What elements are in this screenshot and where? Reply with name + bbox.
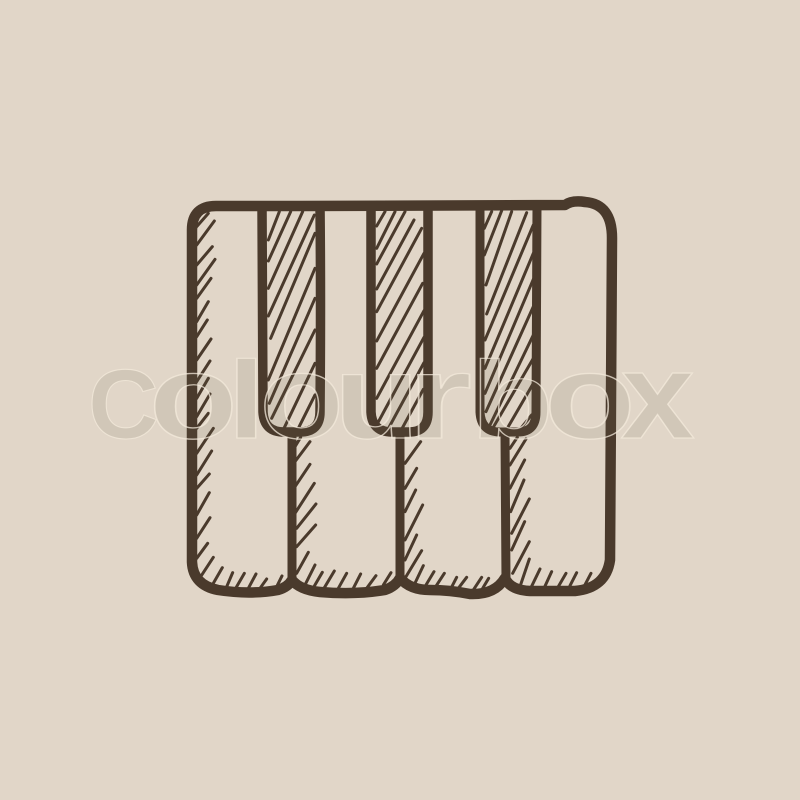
keyboard outer outline bbox=[192, 201, 612, 594]
watermark: o bbox=[260, 330, 344, 464]
watermark: r bbox=[407, 329, 472, 464]
black key 1 bbox=[262, 206, 320, 432]
hatching: upper left white key and black key 1 bbox=[197, 212, 315, 428]
watermark: u bbox=[334, 329, 420, 464]
hatching: lower white keys 3 and 4 bbox=[405, 437, 591, 590]
watermark bbox=[88, 328, 695, 465]
watermark: o bbox=[544, 329, 636, 464]
icon: piano keys bbox=[192, 201, 612, 594]
watermark: x bbox=[621, 328, 695, 465]
black key 3 bbox=[480, 206, 537, 432]
white key dividers bbox=[292, 434, 506, 582]
watermark: l bbox=[228, 339, 265, 462]
hatching: lower white keys 1 and 2 bbox=[197, 428, 391, 588]
watermark: b bbox=[471, 340, 553, 462]
watermark: o bbox=[149, 331, 238, 464]
black key 2 bbox=[371, 206, 428, 432]
watermark: C bbox=[88, 349, 159, 459]
hatching: black key 3 bbox=[484, 211, 533, 428]
hatching: black key 2 bbox=[377, 212, 424, 428]
